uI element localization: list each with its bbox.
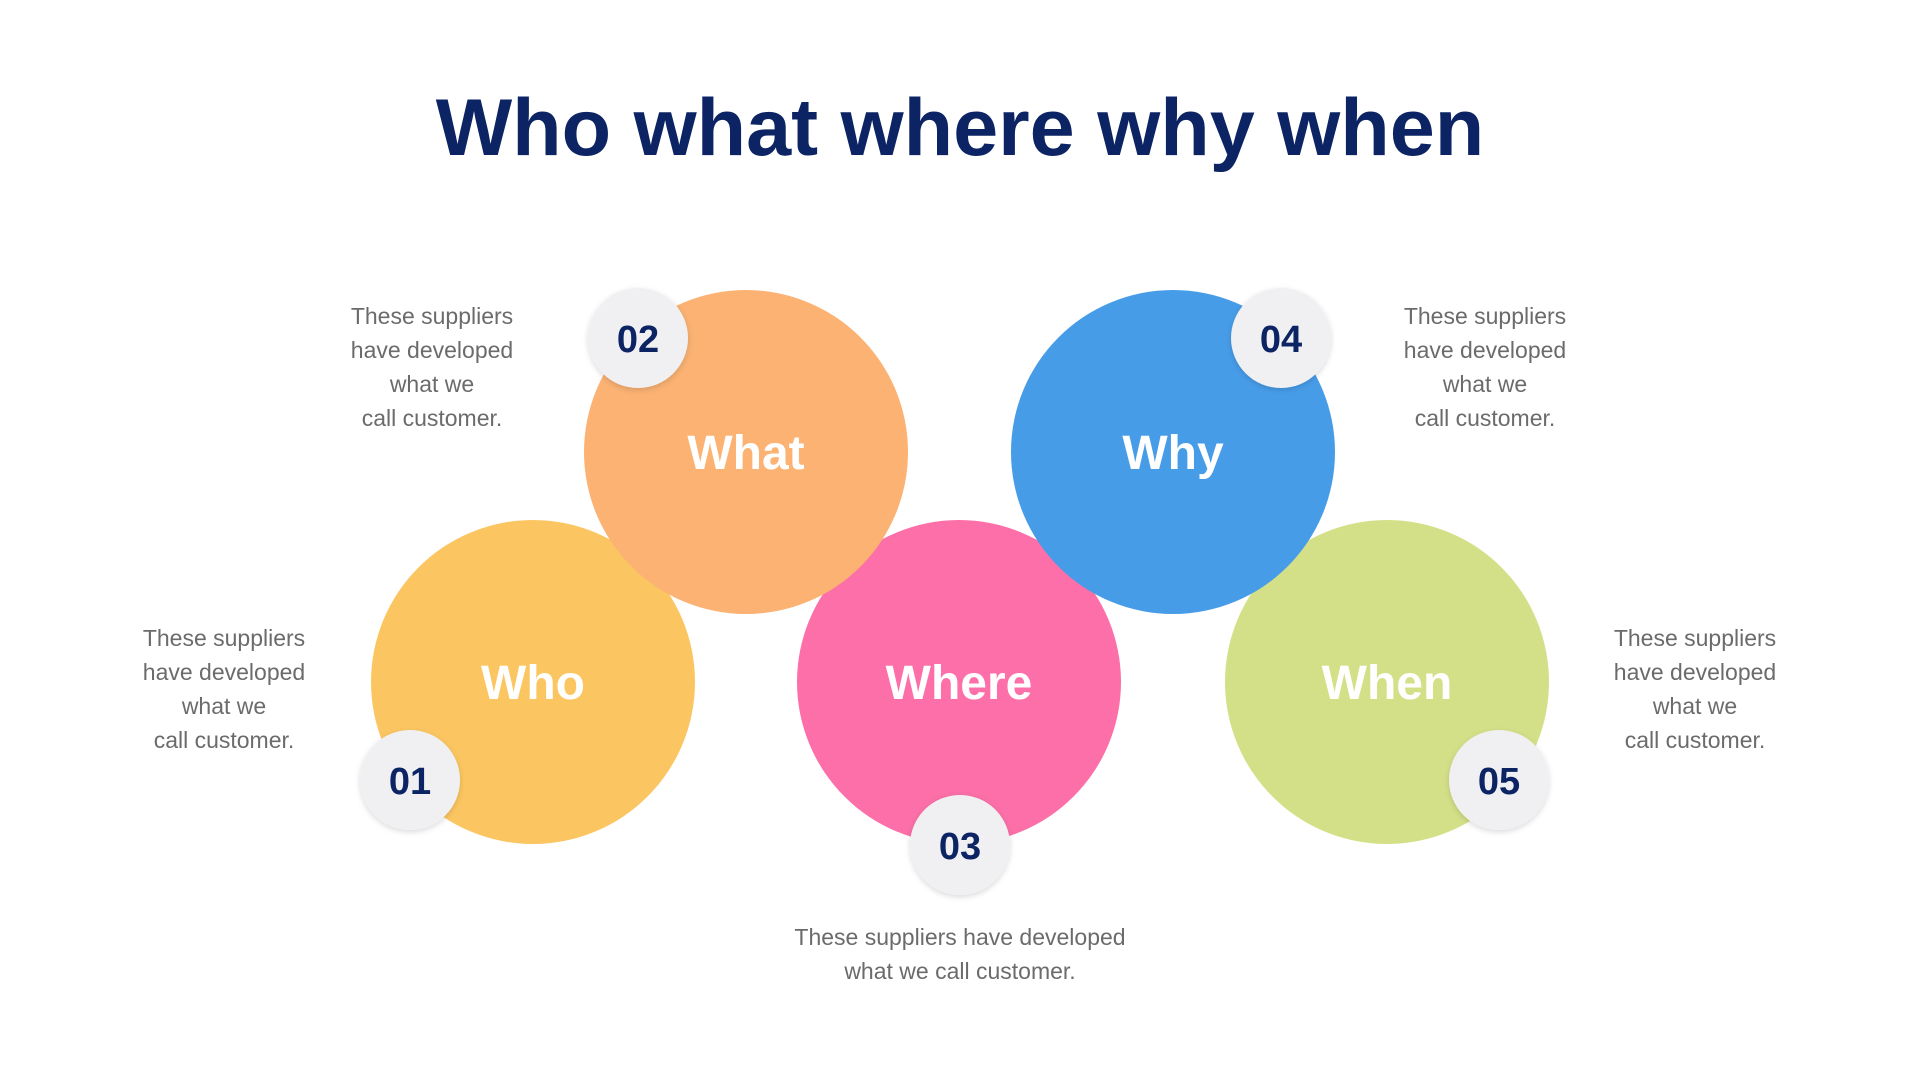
- badge 02: 02: [617, 319, 659, 361]
- text: what: These suppliers: [351, 303, 513, 329]
- badge 01: 01: [389, 761, 431, 803]
- badge 04: 04: [1260, 319, 1302, 361]
- text: why: call customer.: [1415, 405, 1555, 431]
- badge 02: [588, 288, 688, 388]
- text: what: have developed: [351, 337, 513, 363]
- badge 05: [1449, 730, 1549, 830]
- text: what: call customer.: [362, 405, 502, 431]
- circle: Who: Who: [481, 657, 585, 710]
- badge 03: 03: [939, 826, 981, 868]
- circle: Why: Why: [1122, 427, 1224, 480]
- text: why: what we: [1443, 371, 1527, 397]
- title: Who what where why when: [436, 83, 1484, 173]
- text: where: [794, 924, 1126, 984]
- text: why: These suppliers: [1404, 303, 1566, 329]
- badge 03: [910, 795, 1010, 895]
- circle: Where: [797, 520, 1121, 844]
- text: what: what we: [390, 371, 474, 397]
- circle: When: [1225, 520, 1549, 844]
- badge 04: [1231, 288, 1331, 388]
- text: why: [1404, 303, 1566, 431]
- circle: What: [584, 290, 908, 614]
- text: when: call customer.: [1625, 727, 1765, 753]
- text: when: These suppliers: [1614, 625, 1776, 651]
- badge 05: 05: [1478, 761, 1520, 803]
- text: who: have developed: [143, 659, 305, 685]
- text: when: have developed: [1614, 659, 1776, 685]
- badge 01: [360, 730, 460, 830]
- text: who: what we: [182, 693, 266, 719]
- text: where: what we call customer.: [844, 958, 1076, 984]
- circle: Why: [1011, 290, 1335, 614]
- text: why: have developed: [1404, 337, 1566, 363]
- text: when: [1614, 625, 1776, 753]
- circle: Who: [371, 520, 695, 844]
- text: when: what we: [1653, 693, 1737, 719]
- circle: What: What: [687, 427, 805, 480]
- circle: When: When: [1322, 657, 1452, 710]
- text: who: These suppliers: [143, 625, 305, 651]
- text: where: These suppliers have developed: [794, 924, 1126, 950]
- text: who: [143, 625, 305, 753]
- text: who: call customer.: [154, 727, 294, 753]
- circle: Where: Where: [886, 657, 1032, 710]
- text: what: [351, 303, 513, 431]
